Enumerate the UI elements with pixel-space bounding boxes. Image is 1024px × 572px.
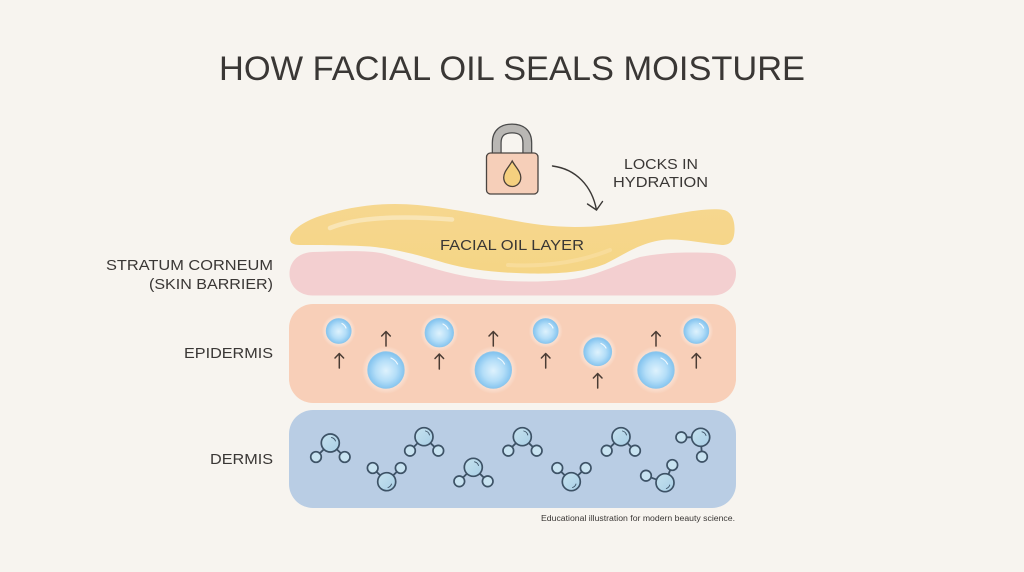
epidermis band <box>289 304 736 403</box>
oil highlight <box>330 217 452 228</box>
callout: locks in hydration <box>613 156 708 191</box>
callout: locks in hydration: LOCKS IN <box>624 156 698 173</box>
dermis band <box>289 410 736 508</box>
moisture bubbles <box>322 314 713 394</box>
title: HOW FACIAL OIL SEALS MOISTURE <box>219 50 805 88</box>
water molecules <box>311 428 710 492</box>
icon: padlock with oil drop <box>486 128 538 194</box>
oil layer label: FACIAL OIL LAYER <box>440 237 584 254</box>
oil lower shine <box>508 250 610 265</box>
label: stratum corneum: STRATUM CORNEUM <box>106 257 273 274</box>
label: stratum corneum: (SKIN BARRIER) <box>149 276 273 293</box>
arrow: lock to oil layer <box>552 166 602 210</box>
label: epidermis: EPIDERMIS <box>184 345 273 362</box>
upward arrows <box>335 332 701 388</box>
panel: epidermis <box>289 304 736 403</box>
label: dermis: DERMIS <box>210 451 273 468</box>
oil shape <box>290 204 735 274</box>
layer: stratum corneum band <box>290 251 736 296</box>
layer: facial oil <box>290 204 735 274</box>
label: stratum corneum <box>106 257 273 293</box>
panel: dermis <box>289 410 736 508</box>
callout: locks in hydration: HYDRATION <box>613 174 708 191</box>
caption: Educational illustration for modern beauty science. <box>541 514 735 523</box>
